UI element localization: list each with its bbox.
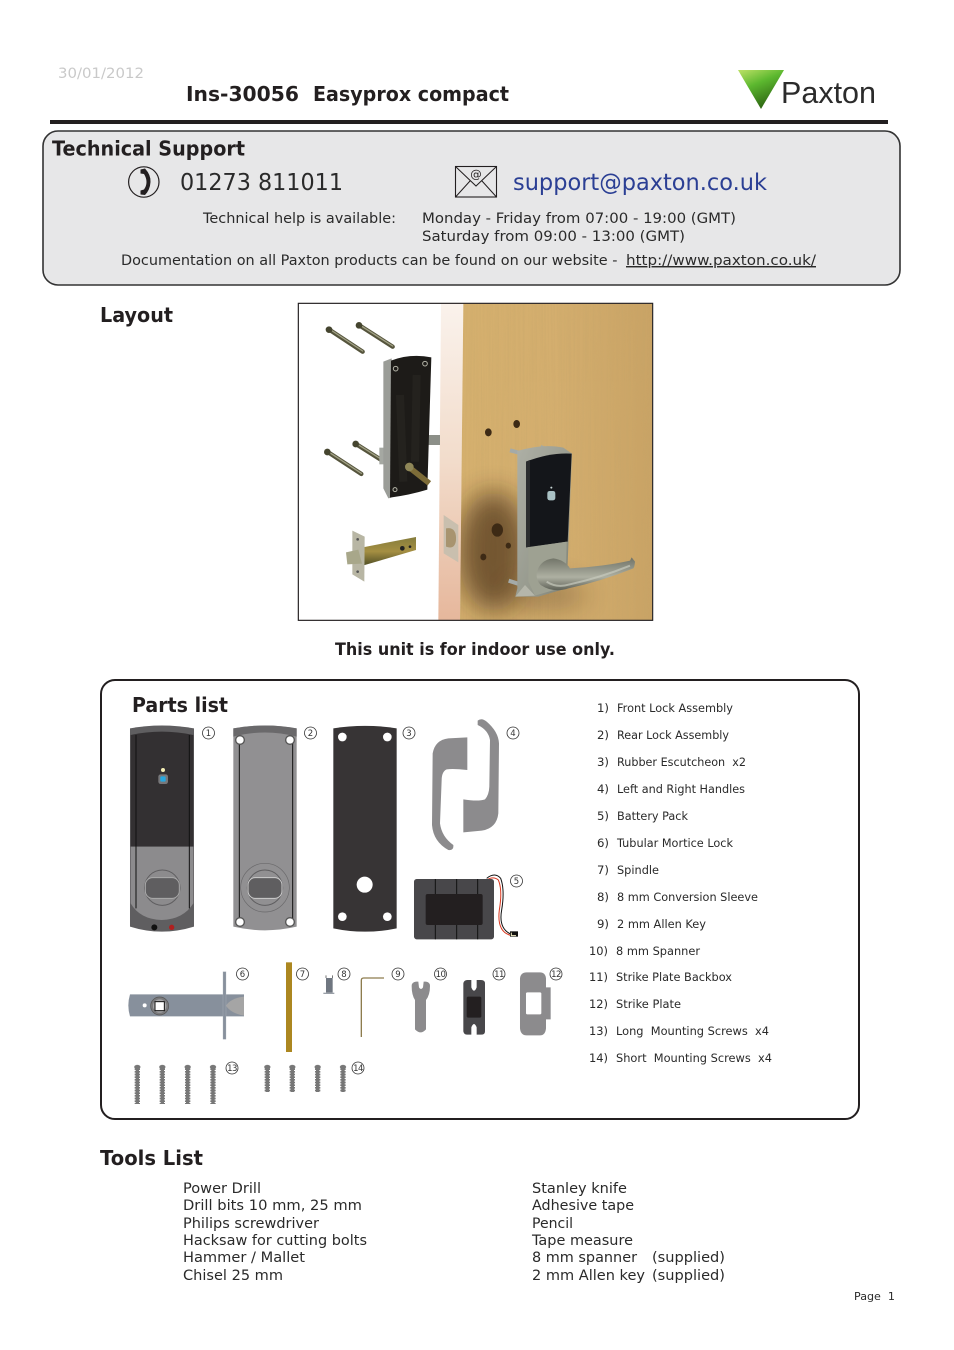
icon: email envelope	[456, 166, 496, 197]
numbered parts legend: 9)	[597, 918, 609, 931]
numbered part callouts: 3	[406, 729, 412, 739]
numbered parts legend: 7)	[597, 864, 609, 877]
numbered parts legend: 10)	[589, 945, 608, 958]
numbered parts legend: Tubular Mortice Lock	[616, 837, 734, 850]
part 10: spanner	[412, 982, 430, 1032]
numbered part callouts: 4	[510, 729, 516, 739]
Paxton logo	[738, 70, 876, 110]
tools list, left column: Power Drill	[183, 1181, 261, 1197]
long bolts	[324, 322, 393, 474]
date: 30/01/2012	[58, 66, 144, 82]
tools list, left column: Hammer / Mallet	[183, 1250, 305, 1266]
tools list, right column: 8 mm spanner	[532, 1250, 637, 1266]
tools list, left column: Chisel 25 mm	[183, 1268, 283, 1284]
page number: Page 1	[854, 1290, 895, 1303]
numbered part callouts: 7	[300, 970, 305, 980]
numbered part callouts: 9	[395, 970, 401, 980]
part 11: strike plate backbox	[463, 980, 485, 1035]
numbered parts legend: Front Lock Assembly	[617, 702, 733, 715]
tools list, right column: Tape measure	[531, 1233, 633, 1249]
tools list, left column: Drill bits 10 mm, 25 mm	[183, 1198, 362, 1214]
numbered part callouts: 10	[436, 970, 445, 980]
numbered parts legend: Left and Right Handles	[617, 783, 745, 796]
numbered parts legend: 14)	[589, 1052, 608, 1065]
tubular latch	[346, 531, 416, 582]
numbered part callouts: 14	[353, 1064, 363, 1074]
door face	[458, 304, 653, 620]
part 6: tubular mortice lock	[128, 972, 244, 1039]
numbered parts legend: 8)	[597, 891, 609, 904]
numbered parts legend: Short Mounting Screws x4	[616, 1052, 772, 1065]
numbered parts legend: Long Mounting Screws x4	[616, 1025, 769, 1038]
numbered part callouts: 12	[551, 970, 561, 980]
numbered parts legend: 8 mm Spanner	[616, 945, 700, 958]
numbered parts legend: 6)	[597, 837, 609, 850]
rear lock plate	[379, 356, 440, 498]
heading: parts list: Parts list	[132, 693, 228, 717]
numbered parts legend: 2 mm Allen Key	[617, 918, 706, 931]
latch mortice	[444, 515, 458, 562]
heading: technical support: Technical Support	[52, 136, 245, 160]
tools list, left column: Philips screwdriver	[183, 1216, 319, 1232]
photo: lock exploded on door	[298, 303, 653, 620]
numbered part callouts: 5	[514, 877, 519, 887]
title: Ins-30056	[186, 82, 299, 106]
tools list, left column	[183, 1181, 367, 1284]
numbered parts legend: 2)	[597, 729, 609, 742]
opening hours: Monday - Friday from 07:00 - 19:00 (GMT)	[422, 211, 736, 227]
heading: layout: Layout	[100, 303, 173, 327]
heading: tools list: Tools List	[100, 1146, 203, 1170]
numbered part callouts: 2	[308, 729, 313, 739]
numbered part callouts: 11	[494, 970, 504, 980]
numbered part callouts: 6	[240, 970, 245, 980]
numbered parts legend: Spindle	[617, 864, 659, 877]
help label: Technical help is available:	[202, 211, 396, 227]
tools list, right column	[531, 1181, 725, 1284]
part 7: spindle	[286, 962, 292, 1052]
numbered parts legend: Rear Lock Assembly	[617, 729, 729, 742]
mounted front lock	[509, 446, 635, 597]
documentation note: Documentation on all Paxton products can be found on our website -	[121, 253, 622, 269]
parts illustrations, upper row	[130, 719, 518, 939]
part 12: strike plate	[520, 972, 551, 1035]
numbered parts legend: Strike Plate Backbox	[616, 971, 732, 984]
icon: telephone	[129, 167, 159, 197]
part 8: conversion sleeve	[323, 975, 334, 994]
panel: parts list	[101, 680, 859, 1119]
numbered parts legend: 1)	[597, 702, 609, 715]
numbered parts legend	[589, 702, 772, 1065]
numbered part callouts: 13	[227, 1064, 237, 1074]
icon: email envelope: @	[470, 167, 482, 181]
tools list, left column: Hacksaw for cutting bolts	[183, 1233, 367, 1249]
numbered part callouts: 8	[341, 970, 347, 980]
caption: indoor use: This unit is for indoor use only.	[335, 640, 615, 659]
Paxton logo: Paxton	[781, 76, 876, 110]
phone number: 01273 811011	[180, 168, 343, 196]
part 14: short mounting screws	[264, 1065, 346, 1092]
part 1: front lock assembly	[130, 725, 194, 932]
numbered parts legend: 11)	[589, 971, 608, 984]
numbered part callouts: 1	[206, 729, 211, 739]
tools list, right column: Adhesive tape	[532, 1198, 634, 1214]
title	[186, 82, 509, 106]
part 9: allen key	[361, 978, 384, 1037]
tools list, right column: (supplied)	[652, 1268, 725, 1284]
numbered parts legend: Rubber Escutcheon x2	[617, 756, 746, 769]
opening hours	[422, 211, 736, 245]
numbered parts legend: Strike Plate	[616, 998, 681, 1011]
parts illustrations, lower rows	[128, 962, 551, 1104]
opening hours: Saturday from 09:00 - 13:00 (GMT)	[422, 229, 685, 245]
tools list, right column: Stanley knife	[532, 1181, 627, 1197]
title: Easyprox compact	[313, 82, 509, 106]
numbered part callouts	[202, 727, 562, 1074]
lever handle	[537, 557, 635, 590]
panel: technical support	[43, 131, 900, 285]
photo frame	[298, 303, 653, 620]
numbered parts legend: 3)	[597, 756, 609, 769]
numbered parts legend: 5)	[597, 810, 609, 823]
numbered parts legend: Battery Pack	[617, 810, 689, 823]
tools list, right column: Pencil	[532, 1216, 573, 1232]
drilled holes	[480, 420, 520, 560]
numbered parts legend: 12)	[589, 998, 608, 1011]
numbered parts legend: 8 mm Conversion Sleeve	[617, 891, 758, 904]
header rule	[50, 120, 888, 124]
email address: support@paxton.co.uk	[513, 168, 767, 196]
tools list, right column: (supplied)	[652, 1250, 725, 1266]
part 13: long mounting screws	[134, 1065, 216, 1104]
door edge	[438, 304, 463, 620]
numbered parts legend: 4)	[597, 783, 609, 796]
numbered parts legend: 13)	[589, 1025, 608, 1038]
part 3: rubber escutcheon	[333, 726, 397, 932]
documentation note: http://www.paxton.co.uk/	[626, 253, 816, 269]
tools list, right column: 2 mm Allen key	[532, 1268, 645, 1284]
part 5: battery pack	[414, 875, 518, 939]
part 2: rear lock assembly	[233, 725, 297, 930]
part 4: handles	[432, 719, 499, 850]
